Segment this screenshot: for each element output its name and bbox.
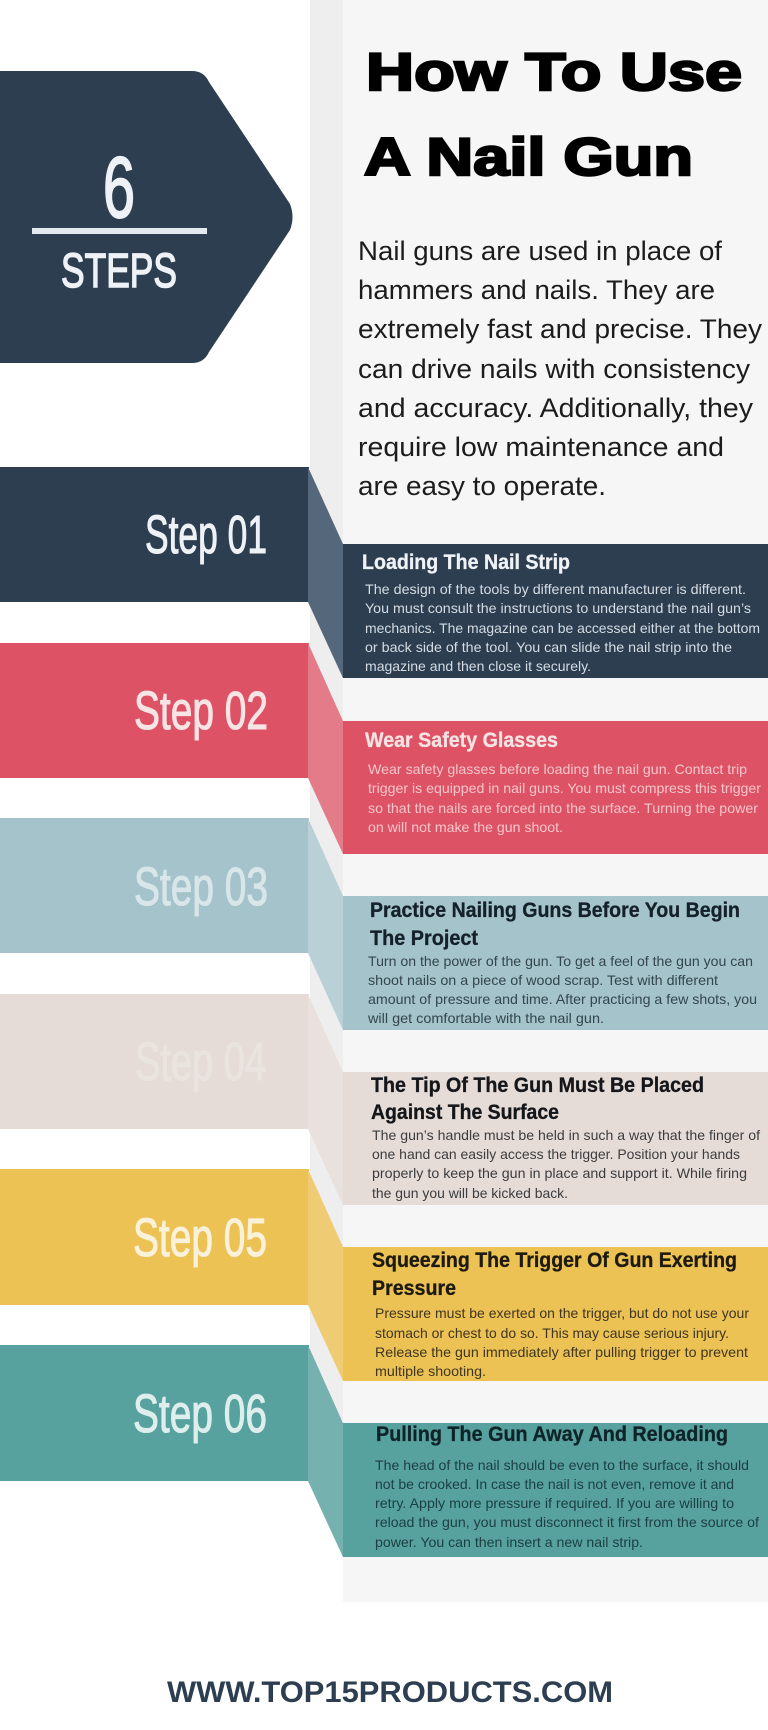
step 05 body: stomach or chest to do so. This may cause serious injury.: [375, 1325, 729, 1341]
step 06 fold: [308, 1345, 343, 1557]
step 01 heading: Loading The Nail Strip: [362, 551, 570, 574]
step 06 panel: [343, 1423, 768, 1557]
intro paragraph: can drive nails with consistency: [358, 354, 751, 384]
step 02 heading: Wear Safety Glasses: [365, 729, 558, 752]
step 03 heading: The Project: [370, 927, 478, 950]
step 05: [0, 1169, 768, 1381]
step 06 body: The head of the nail should be even to the surface, it should: [375, 1457, 749, 1473]
step 01: [0, 467, 768, 678]
step 04 body: the gun you will be kicked back.: [372, 1185, 568, 1201]
step 03 ribbon bar: [0, 818, 309, 953]
step 04: [0, 994, 768, 1205]
step 05 panel: [343, 1247, 768, 1381]
step 02 body: on will not make the gun shoot.: [368, 819, 563, 835]
step 02: [0, 643, 768, 854]
intro paragraph: Nail guns are used in place of: [358, 236, 722, 266]
step 04 body: The gun’s handle must be held in such a way that the finger of: [372, 1127, 760, 1143]
intro paragraph: extremely fast and precise. They: [358, 314, 763, 344]
step 03 body: [367, 953, 757, 1026]
step 01 panel: [343, 544, 768, 678]
title: [364, 43, 742, 187]
step 01 ribbon bar: [0, 467, 309, 602]
step 04 panel: [343, 1072, 768, 1205]
step 02 panel: [343, 721, 768, 854]
step 05 body: [375, 1305, 749, 1379]
step 05 heading: Squeezing The Trigger Of Gun Exerting: [372, 1249, 737, 1272]
step 04 body: one hand can easily access the trigger. Position your hands: [372, 1146, 740, 1162]
step 04 heading: Against The Surface: [371, 1101, 559, 1124]
step 04 fold: [308, 994, 343, 1205]
step 06: [0, 1345, 768, 1557]
step 03 fold: [308, 818, 343, 1030]
step 06 label: Step 06: [133, 1384, 267, 1444]
step 03 heading: Practice Nailing Guns Before You Begin: [370, 899, 740, 922]
step 03 heading: [370, 899, 740, 950]
step 05 fold: [308, 1169, 343, 1381]
step 05 body: multiple shooting.: [375, 1363, 486, 1379]
step 02 fold: [308, 643, 343, 854]
step 03 body: amount of pressure and time. After practicing a few shots, you: [368, 991, 757, 1007]
step 05 heading: Pressure: [372, 1277, 456, 1300]
step 05 ribbon bar: [0, 1169, 309, 1305]
step 06 body: reload the gun, you must disconnect it first from the source of: [375, 1514, 759, 1530]
step 04 ribbon bar: [0, 994, 309, 1129]
step 05 label: Step 05: [133, 1208, 267, 1268]
step 06 body: power. You can then insert a new nail strip.: [375, 1534, 643, 1550]
step 03 label: Step 03: [134, 857, 268, 917]
step 06 body: [375, 1457, 759, 1550]
intro paragraph: and accuracy. Additionally, they: [358, 393, 754, 423]
step 02 body: trigger is equipped in nail guns. You must compress this trigger: [368, 780, 761, 796]
step 05 heading: [372, 1249, 737, 1300]
step 02 body: Wear safety glasses before loading the nail gun. Contact trip: [368, 761, 747, 777]
title: A Nail Gun: [364, 128, 693, 187]
intro paragraph: are easy to operate.: [358, 471, 606, 501]
step 02 body: [368, 761, 761, 835]
step 01 body: or back side of the tool. You can slide the nail strip into the: [365, 639, 732, 655]
step 01 body: mechanics. The magazine can be accessed either at the bottom: [365, 620, 760, 636]
intro paragraph: [358, 236, 763, 501]
step 01 body: The design of the tools by different manufacturer is different.: [365, 581, 746, 597]
step 04 heading: The Tip Of The Gun Must Be Placed: [371, 1074, 704, 1097]
step 01 body: You must consult the instructions to understand the nail gun’s: [365, 600, 751, 616]
step 03 body: will get comfortable with the nail gun.: [367, 1010, 604, 1026]
step 03 body: Turn on the power of the gun. To get a feel of the gun you can: [368, 953, 753, 969]
step 01 body: magazine and then close it securely.: [365, 658, 591, 674]
step 02 body: so that the nails are forced into the surface. Turning the power: [368, 800, 758, 816]
step 04 heading: [371, 1074, 704, 1124]
step 05 body: Pressure must be exerted on the trigger, but do not use your: [375, 1305, 749, 1321]
step 02 ribbon bar: [0, 643, 309, 778]
label: STEPS: STEPS: [61, 245, 177, 298]
step 04 body: [372, 1127, 760, 1201]
number 6: 6: [103, 140, 135, 236]
step 03 body: shoot nails on a piece of wood scrap. Test with different: [368, 972, 718, 988]
intro paragraph: require low maintenance and: [358, 432, 724, 462]
step 03: [0, 818, 768, 1030]
step 04 body: properly to keep the gun in place and support it. While firing: [372, 1165, 747, 1181]
step 05 body: Release the gun immediately after pulling trigger to prevent: [375, 1344, 748, 1360]
step 01 label: Step 01: [145, 505, 267, 565]
step 06 ribbon bar: [0, 1345, 309, 1481]
step 01 fold: [308, 467, 343, 678]
step 03 panel: [343, 896, 768, 1030]
step 01 body: [365, 581, 760, 674]
step 06 body: not be crooked. In case the nail is not even, remove it and: [375, 1476, 734, 1492]
step 06 body: retry. Apply more pressure if required. If you are willing to: [375, 1495, 734, 1511]
intro paragraph: hammers and nails. They are: [358, 275, 715, 305]
step 06 heading: Pulling The Gun Away And Reloading: [376, 1423, 728, 1446]
step 04 label: Step 04: [135, 1032, 266, 1092]
footer website: WWW.TOP15PRODUCTS.COM: [167, 1676, 613, 1709]
title: How To Use: [366, 43, 742, 102]
step 02 label: Step 02: [134, 681, 268, 741]
divider line: [32, 228, 207, 234]
badge: 6 steps pentagon: [0, 71, 292, 363]
